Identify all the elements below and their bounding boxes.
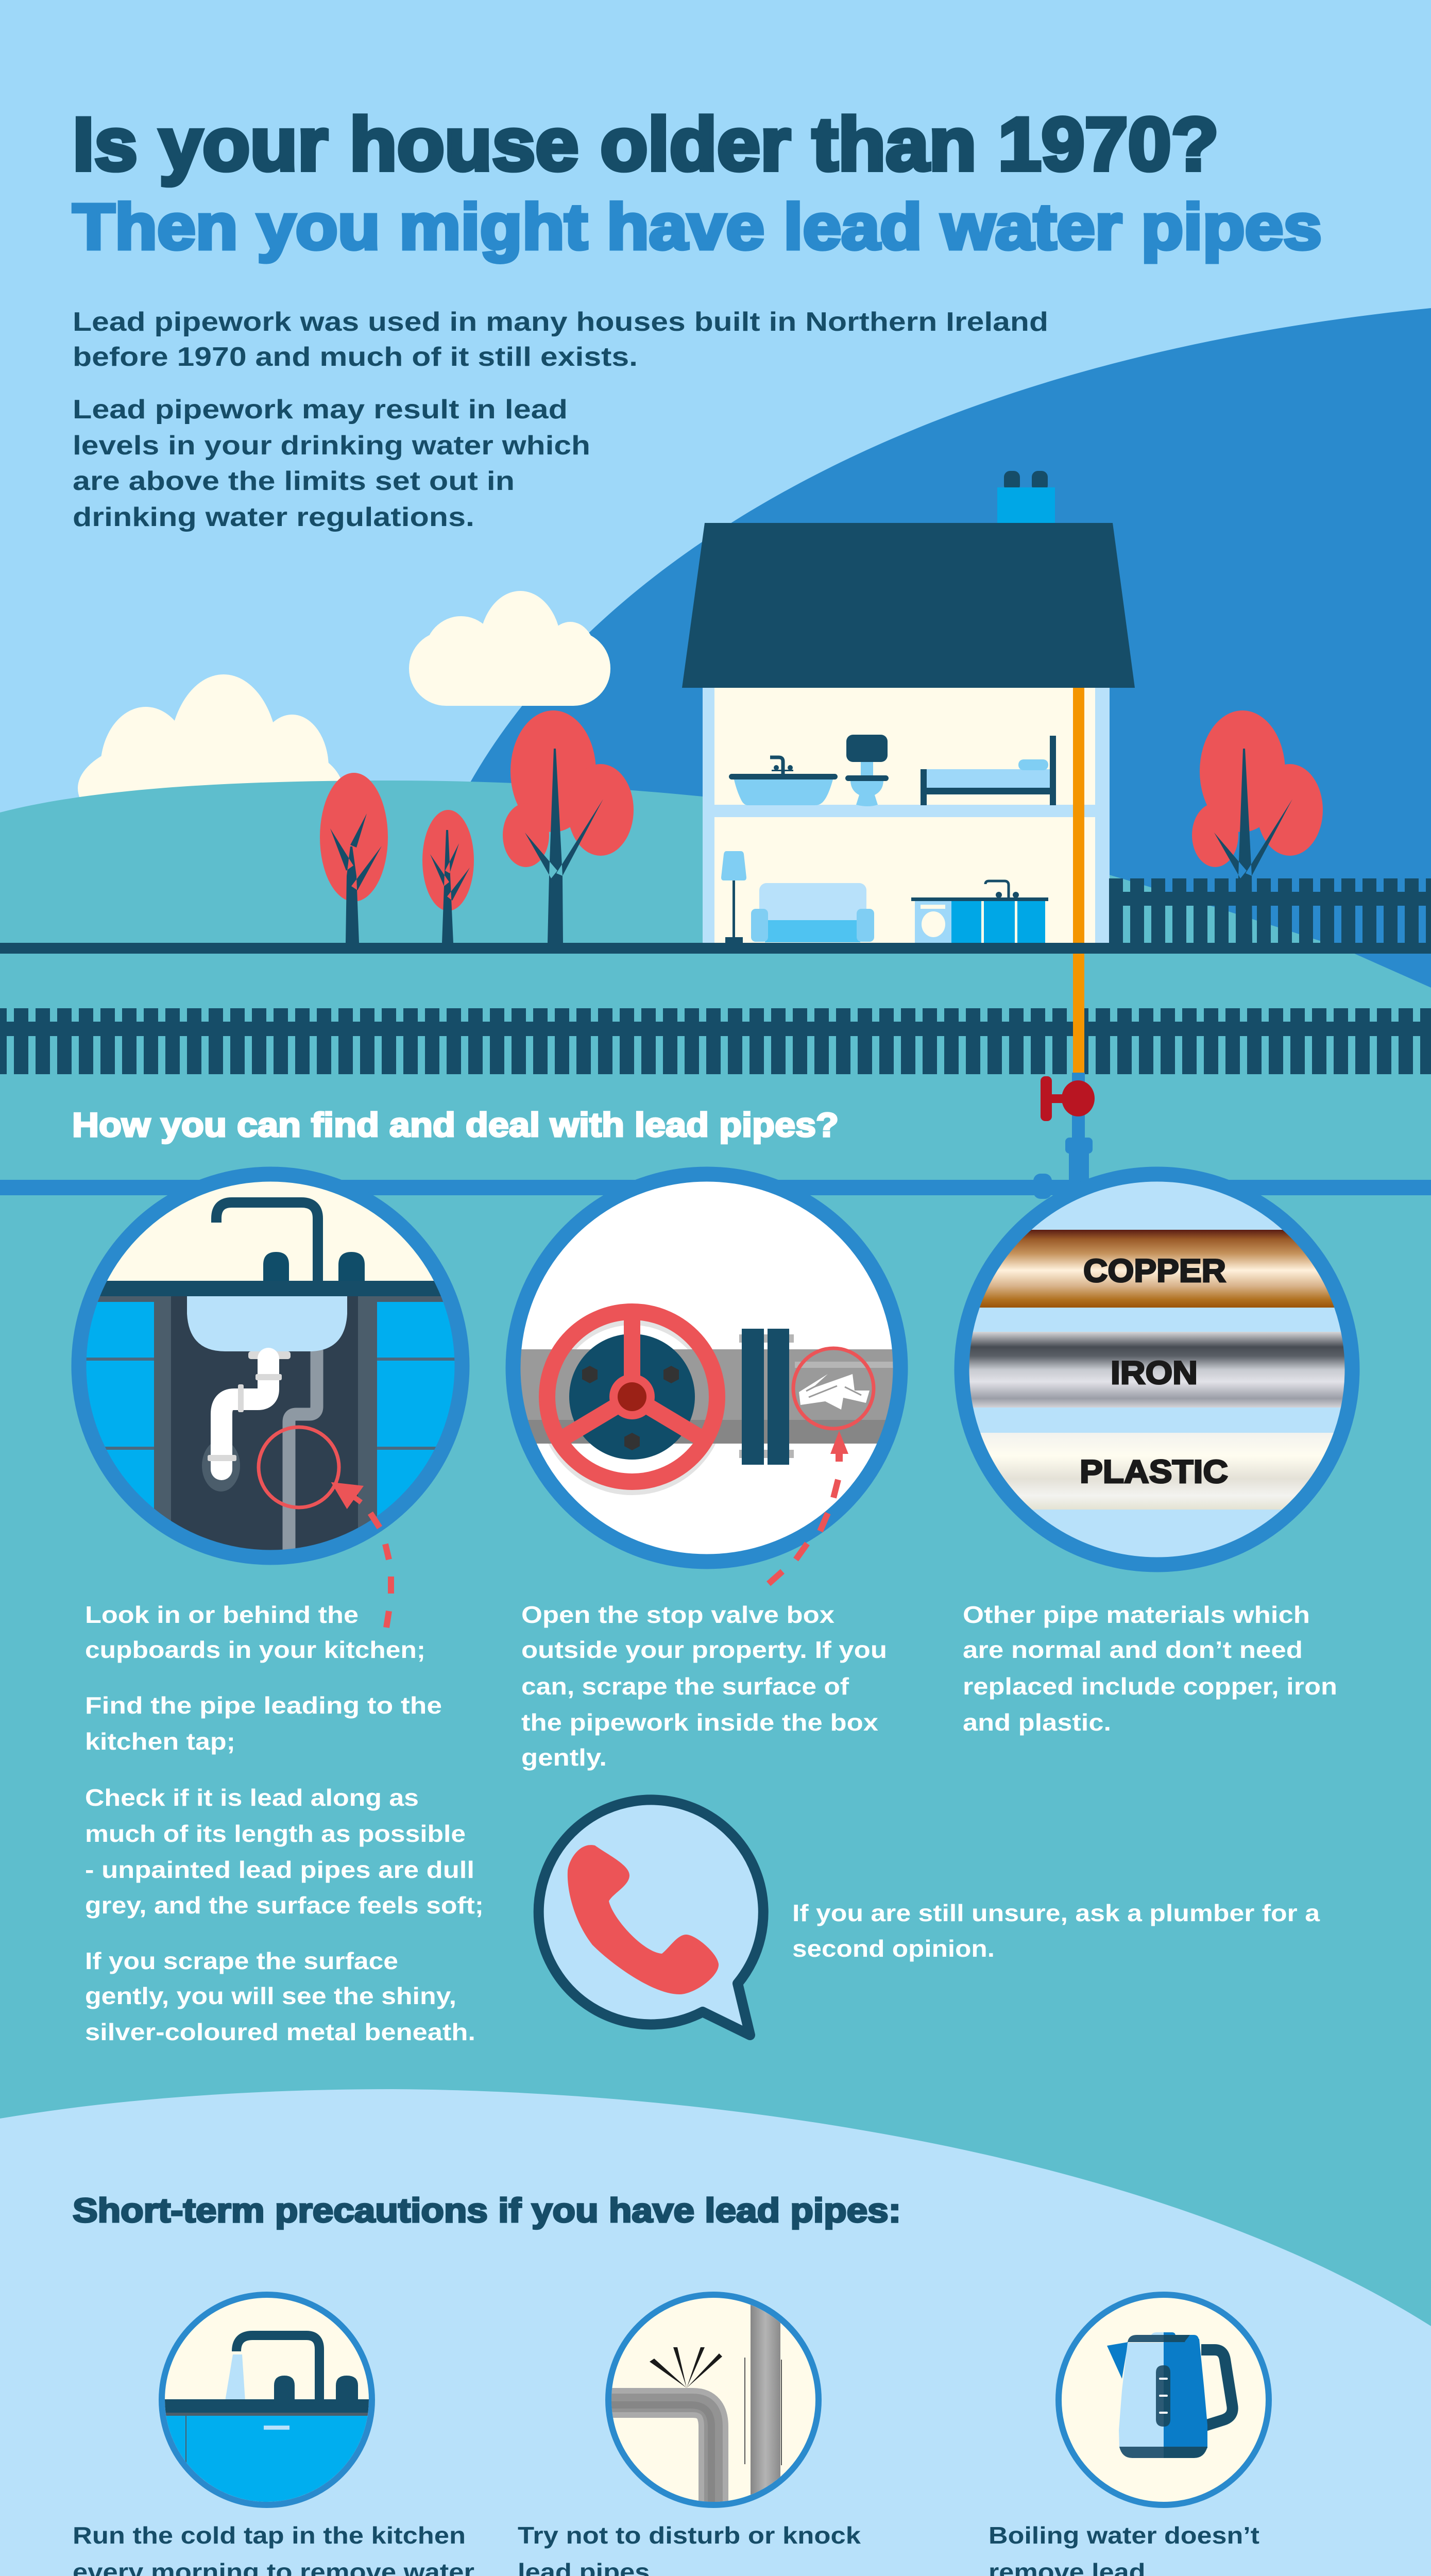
text column 1: Find the pipe leading to the [85,1692,442,1719]
orange lead pipe [1073,688,1084,1073]
plastic pipe [958,1433,1360,1510]
bed [921,736,1056,805]
bath [729,757,838,805]
text column 2 [521,1601,887,1771]
heading: how you can find: How you can find and deal with lead pipes? [72,1106,839,1144]
intro paragraph 2: levels in your drinking water which [73,431,590,461]
tree 4 [1192,710,1323,943]
circle: under-sink cupboard [67,1164,474,1628]
text: run the cold tap: Run the cold tap in the kitchen [73,2522,466,2549]
ground line over pipe [1073,943,1084,954]
text column 1: Look in or behind the [85,1601,359,1628]
scraped metal [799,1374,870,1410]
toilet [845,735,889,806]
tree 3 [503,710,634,943]
text: do not knock pipes: Try not to disturb or knock [518,2522,861,2549]
blue main pipe [0,1180,1431,1195]
dashed arrow 2 [769,1431,848,1584]
house walls [703,688,1110,943]
blue hill [470,308,1431,989]
tap [216,1202,318,1281]
water stream [225,2354,245,2401]
dashed arrow 1 [336,1485,391,1628]
title: Is your house older than 1970? [73,102,1219,186]
text column 1: silver-coloured metal beneath. [85,2019,475,2045]
text column 2: gently. [521,1744,607,1771]
kitchen units [911,881,1048,943]
impact spark lines [650,2347,722,2388]
sink bowl [187,1296,347,1351]
text column 1: grey, and the surface feels soft; [85,1892,484,1919]
circle: stop valve box [505,1164,912,1584]
text: plumber advice: If you are still unsure, ask a plumber for a [792,1900,1320,1926]
text column 2: outside your property. If you [521,1636,887,1663]
text column 1: kitchen tap; [85,1728,235,1755]
text: boiling water: Boiling water doesn’t [989,2522,1259,2549]
valve wheel [547,1312,717,1482]
icon: phone speech bubble [539,1800,763,2035]
garden fence [1109,878,1431,943]
icon: knocked pipe [603,2287,819,2514]
cloud left [78,674,343,845]
text: plumber advice [792,1900,1320,1962]
text column 2: Open the stop valve box [521,1601,834,1628]
intro paragraph 1 [73,307,1048,372]
label copper: COPPER [1083,1253,1226,1289]
tree 2 [422,810,474,943]
text column 3: are normal and don’t need [963,1636,1303,1663]
label plastic: PLASTIC [1080,1454,1228,1490]
label iron: IRON [1111,1355,1198,1391]
text column 1: Check if it is lead along as [85,1784,419,1811]
text column 2: can, scrape the surface of [521,1673,849,1700]
text: boiling water [989,2522,1259,2576]
text column 3: Other pipe materials which [963,1601,1310,1628]
text column 1: much of its length as possible [85,1820,466,1847]
white waste pipe [222,1359,268,1469]
icon: running tap [155,2295,381,2514]
roof [682,523,1135,688]
text column 1: - unpainted lead pipes are dull [85,1856,474,1883]
text: do not knock pipes [518,2522,861,2576]
sofa [751,883,874,942]
subtitle: Then you might have lead water pipes [73,191,1322,263]
red highlight circle [259,1427,339,1507]
text: plumber advice: second opinion. [792,1935,995,1962]
text column 1: If you scrape the surface [85,1947,398,1974]
teal hill and section background [0,781,1431,2421]
house [682,471,1135,943]
vibration lines [744,2358,745,2464]
lamp [721,851,746,943]
circle: pipe materials [958,1170,1360,1571]
text column 3 [963,1601,1337,1736]
intro paragraph 2: are above the limits set out in [73,466,515,496]
red highlight circle 2 [793,1348,874,1429]
underground fence strip [0,1008,1431,1074]
copper pipe [958,1230,1360,1308]
text column 1 [85,1601,484,2045]
text column 3: and plastic. [963,1709,1111,1736]
tree 1 [320,773,388,943]
flange [739,1329,794,1465]
precautions section background [0,2089,1431,2576]
lead pipe under sink [289,1350,317,1551]
red stop valve [1041,1076,1095,1121]
iron pipe [958,1332,1360,1408]
intro paragraph 1: before 1970 and much of it still exists. [73,342,638,372]
intro paragraph 2: Lead pipework may result in lead [73,395,568,425]
upper room [714,688,1095,805]
lower room [714,817,1095,943]
cloud right [409,591,610,706]
ground line [0,943,1431,954]
intro paragraph 1: Lead pipework was used in many houses built in Northern Ireland [73,307,1048,337]
trap shadow [202,1440,240,1492]
heading: short-term precautions: Short-term precautions if you have lead pipes: [73,2191,901,2229]
chimney [997,471,1055,523]
text column 1: cupboards in your kitchen; [85,1636,425,1663]
intro paragraph 2: drinking water regulations. [73,502,474,532]
text column 3: replaced include copper, iron [963,1673,1337,1700]
intro paragraph 2 [73,395,590,532]
service pipe and stop valve [1033,688,1095,1199]
text: run the cold tap [73,2522,478,2576]
text column 1: gently, you will see the shiny, [85,1982,456,2009]
text column 2: the pipework inside the box [521,1709,878,1736]
icon: kettle [1059,2295,1269,2505]
